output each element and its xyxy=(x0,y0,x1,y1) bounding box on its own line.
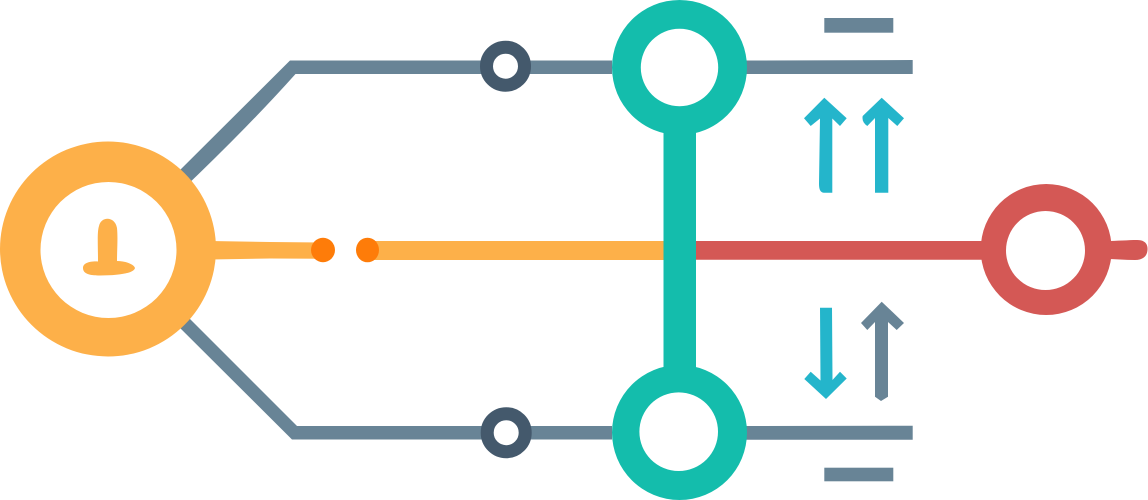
red wire stub xyxy=(1105,240,1148,260)
arrow: up grey xyxy=(861,302,904,401)
icon: battery terminal glyph xyxy=(83,219,135,276)
large orange ring xyxy=(0,142,216,356)
upper grey wire xyxy=(170,60,612,190)
lower right grey wire xyxy=(745,426,913,440)
upper right grey wire xyxy=(745,60,913,74)
arrow: down left xyxy=(804,308,847,399)
red wire xyxy=(694,241,990,260)
teal vertical bar xyxy=(664,120,696,380)
top small node xyxy=(486,47,524,85)
right orange dot xyxy=(356,238,379,262)
lower grey wire xyxy=(170,309,612,440)
middle orange wire segment xyxy=(367,241,666,260)
arrow: up right xyxy=(862,98,904,193)
bottom teal ring xyxy=(612,365,747,500)
bottom small node xyxy=(487,414,525,452)
left orange dot xyxy=(311,238,335,262)
arrow: up left xyxy=(804,98,847,193)
left orange wire segment xyxy=(210,241,322,260)
bottom minus bar xyxy=(824,468,893,481)
top teal ring xyxy=(612,0,747,135)
red ring xyxy=(981,184,1112,315)
top minus bar xyxy=(824,18,893,33)
